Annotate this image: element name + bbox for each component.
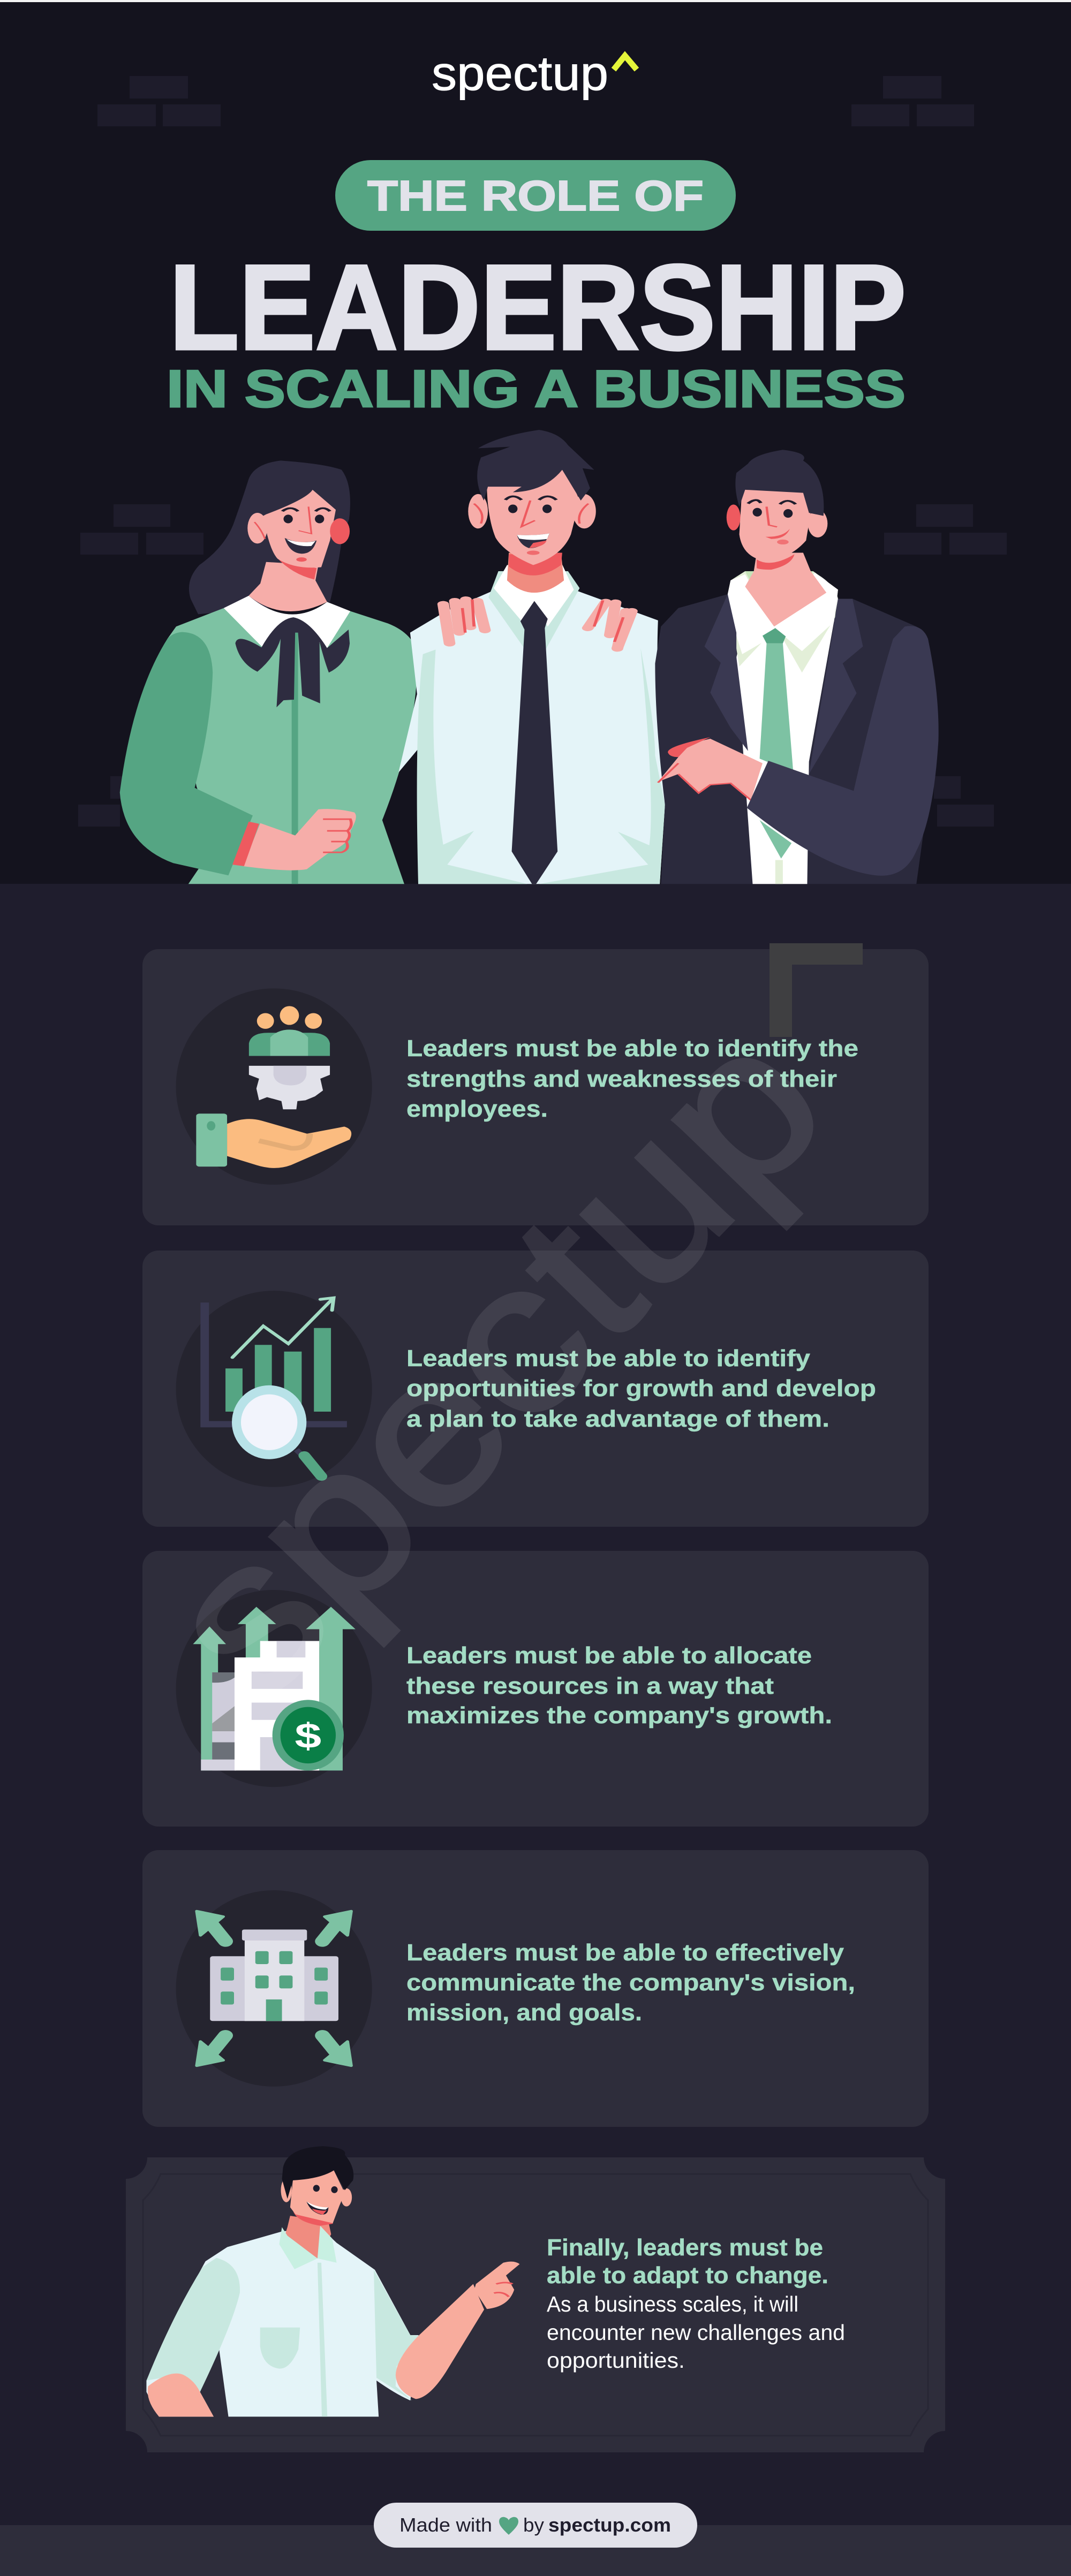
text: card 4: communicate the company's vision, — [406, 1969, 855, 1996]
text: card 4 — [406, 1939, 855, 2026]
panel: card 1 — [142, 949, 929, 1225]
panel: card 4 — [142, 1850, 929, 2127]
text: card 3: maximizes the company's growth. — [406, 1702, 832, 1729]
text: card 1: Leaders must be able to identify the — [406, 1035, 858, 1062]
footer pill: made with love by spectup.com: Made with — [399, 2514, 492, 2536]
text: card 3: Leaders must be able to allocate — [406, 1642, 812, 1669]
icon: office building with outward arrows — [176, 1890, 372, 2087]
text: final callout: Finally, leaders must be — [547, 2234, 823, 2261]
footer pill: made with love by spectup.com — [374, 2503, 697, 2548]
title: leadership: LEADERSHIP — [169, 239, 906, 375]
text: card 4: Leaders must be able to effectively — [406, 1939, 844, 1966]
text: final callout: As a business scales, it will — [547, 2292, 798, 2316]
icon: growth chart with magnifier — [176, 1291, 372, 1487]
text: card 1: strengths and weaknesses of their — [406, 1066, 837, 1092]
text: card 3: these resources in a way that — [406, 1673, 774, 1699]
icon: building with rising arrows and dollar coin — [176, 1590, 372, 1787]
illustration: three business people — [120, 430, 939, 884]
footer pill: made with love by spectup.com: spectup.com — [548, 2514, 671, 2536]
text: card 3 — [406, 1642, 832, 1729]
text: card 2: Leaders must be able to identify — [406, 1345, 811, 1372]
figure: pointing man — [146, 2146, 519, 2416]
icon: heart — [499, 2517, 518, 2535]
panel: card 2 — [142, 1251, 929, 1527]
text: final callout: opportunities. — [547, 2348, 685, 2373]
text: final callout: able to adapt to change. — [547, 2262, 828, 2289]
text: card 2: a plan to take advantage of them. — [406, 1406, 829, 1432]
text: card 2: opportunities for growth and develop — [406, 1375, 876, 1401]
watermark: rotated spectup logo: spectup — [119, 980, 869, 1744]
icon: building with rising arrows and dollar coin: $ — [295, 1716, 321, 1755]
text: card 2 — [406, 1345, 876, 1432]
footer band — [0, 2525, 1071, 2576]
panel: final leader callout — [126, 2146, 945, 2452]
text: card 1: employees. — [406, 1096, 548, 1122]
figure: right man — [655, 450, 939, 884]
text: card 1 — [406, 1035, 858, 1122]
footer pill: made with love by spectup.com: by — [523, 2514, 544, 2536]
figure: centre man — [398, 430, 665, 884]
title pill: the role of: THE ROLE OF — [367, 172, 704, 219]
text: final callout — [547, 2234, 845, 2373]
text: card 4: mission, and goals. — [406, 1999, 642, 2026]
panel: card 3 — [142, 1551, 929, 1827]
logo: spectup: spectup — [432, 47, 608, 101]
subtitle: in scaling a business: IN SCALING A BUSINESS — [167, 359, 906, 418]
title pill: the role of — [335, 160, 736, 231]
figure: woman — [120, 460, 417, 884]
text: final callout: encounter new challenges and — [547, 2320, 845, 2345]
icon: team in open hand — [176, 988, 372, 1185]
